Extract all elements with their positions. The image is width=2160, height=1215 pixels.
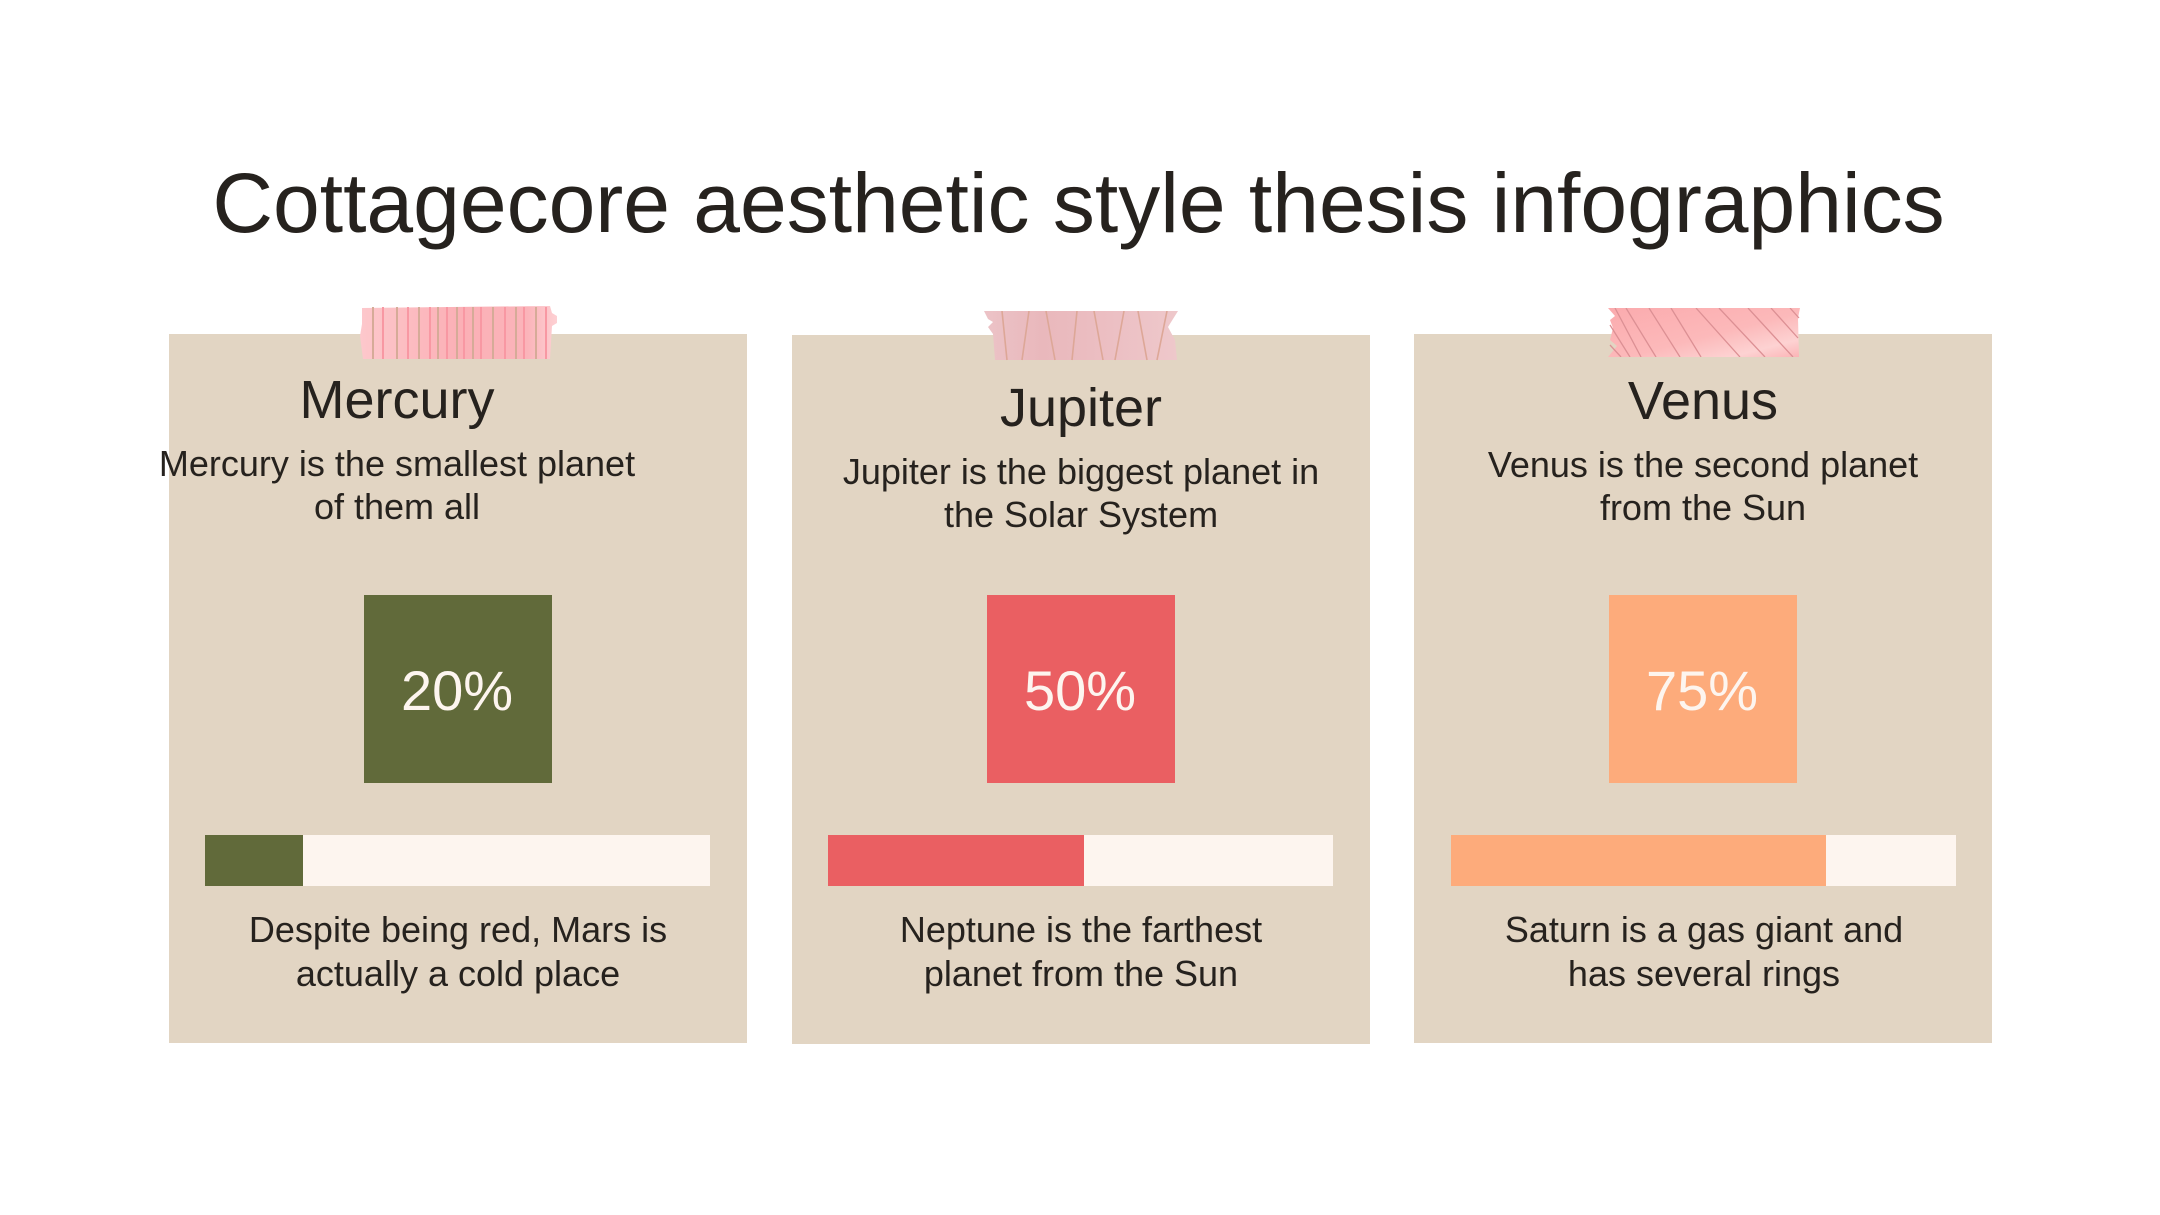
text: Venus note: has several rings xyxy=(1568,953,1840,994)
bar fill: 20% xyxy=(205,835,303,886)
stat: Mercury 20%: 20% xyxy=(401,659,513,722)
panel: Venus card xyxy=(1414,334,1992,1043)
washi tape: Venus xyxy=(1608,308,1800,357)
stat: Venus 75%: 75% xyxy=(1646,659,1758,722)
text: Venus description xyxy=(1488,444,1918,528)
text: Jupiter note: planet from the Sun xyxy=(924,953,1238,994)
text: Mercury description: of them all xyxy=(314,486,480,527)
text: Jupiter description: Jupiter is the biggest planet in xyxy=(843,451,1319,492)
bar fill: 75% xyxy=(1451,835,1826,886)
heading: Mercury: Mercury xyxy=(299,370,494,430)
stat: Mercury 20% xyxy=(364,595,552,783)
bar fill: 50% xyxy=(828,835,1084,886)
panel: Mercury card xyxy=(169,334,747,1043)
stat: Venus 75% xyxy=(1609,595,1797,783)
progress bar: Venus xyxy=(1451,835,1956,886)
text: Mercury description: Mercury is the smallest planet xyxy=(159,443,635,484)
text: Venus description: Venus is the second planet xyxy=(1488,444,1918,485)
text: Mercury note xyxy=(249,909,667,994)
text: Venus description: from the Sun xyxy=(1600,487,1806,528)
text: Mercury description xyxy=(159,443,635,527)
panel: Jupiter card xyxy=(792,335,1370,1044)
text: Venus note xyxy=(1505,909,1903,994)
stat: Jupiter 50%: 50% xyxy=(1024,659,1136,722)
text: Jupiter note: Neptune is the farthest xyxy=(900,909,1262,950)
text: Venus note: Saturn is a gas giant and xyxy=(1505,909,1903,950)
progress bar: Jupiter xyxy=(828,835,1333,886)
title: Cottagecore aesthetic style thesis infographics xyxy=(212,156,1945,250)
text: Jupiter note xyxy=(900,909,1262,994)
text: Mercury note: Despite being red, Mars is xyxy=(249,909,667,950)
text: Jupiter description: the Solar System xyxy=(944,494,1218,535)
washi tape: Jupiter xyxy=(984,311,1178,360)
text: Jupiter description xyxy=(843,451,1319,535)
heading: Venus: Venus xyxy=(1628,371,1778,431)
washi tape: Mercury xyxy=(360,306,557,359)
progress bar: Mercury xyxy=(205,835,710,886)
stat: Jupiter 50% xyxy=(987,595,1175,783)
text: Mercury note: actually a cold place xyxy=(296,953,620,994)
heading: Jupiter: Jupiter xyxy=(1000,378,1162,438)
